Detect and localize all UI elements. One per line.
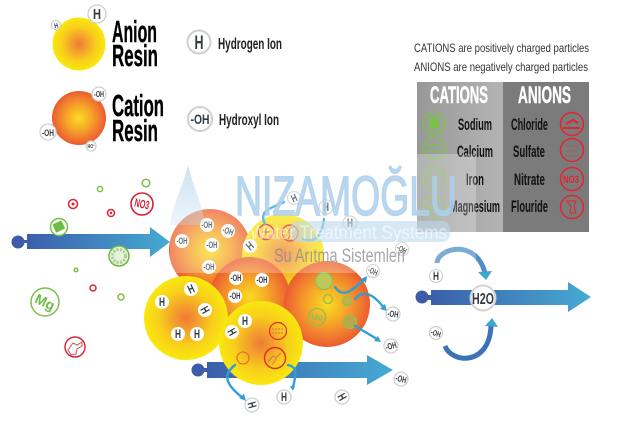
hydrogen joining water <box>430 249 492 283</box>
anion sphere: lower left <box>144 276 228 360</box>
anion resin legend: H <box>54 23 59 30</box>
cation resin legend: -OH <box>94 90 104 99</box>
ion names: Flouride <box>511 197 548 216</box>
ion names: Iron <box>466 170 484 189</box>
ion names <box>450 115 548 216</box>
water formation arrow <box>416 282 591 312</box>
captured cations in green <box>308 272 356 328</box>
cation sphere: centre <box>210 257 290 337</box>
hydrogen joining water: H <box>433 269 439 283</box>
floating contaminant particles: Mg <box>32 290 58 314</box>
hydroxyl ions on cation spheres: -OH <box>204 262 214 272</box>
hydrogen ion legend <box>188 30 282 54</box>
floating contaminant particles <box>31 179 153 357</box>
released hydrogen ions: H <box>244 400 260 410</box>
hydroxyl ions on cation spheres: -OH <box>230 273 242 283</box>
anion resin legend <box>52 5 158 73</box>
hydroxyl ions on cation spheres: -OH <box>221 224 235 238</box>
anion sphere: upper right <box>242 214 324 296</box>
hydroxyl ions on cation spheres <box>175 218 269 303</box>
hydrogen ions on anion spheres: H <box>185 281 197 297</box>
particles on inlet arrow <box>50 218 129 266</box>
released hydrogen ions: H <box>347 216 353 230</box>
ion names: Sulfate <box>513 142 545 161</box>
cation resin legend: -OH <box>87 142 94 148</box>
hydroxyl joining water <box>430 318 498 358</box>
ion names: Calcium <box>457 142 493 161</box>
hydrogen ion legend: Hydrogen Ion <box>218 36 282 53</box>
ion names: Chloride <box>511 115 548 134</box>
hydrogen ions on anion spheres: H <box>175 327 181 341</box>
hydroxyl ions on cation spheres: -OH <box>206 240 218 250</box>
hydroxyl ions on cation spheres: -OH <box>230 291 240 301</box>
hydrogen ions on anion spheres: H <box>197 304 213 316</box>
cation resin legend: -OH <box>42 128 54 138</box>
hydrogen ions on anion spheres: H <box>224 326 240 338</box>
outlet arrow bottom <box>192 355 393 385</box>
released hydroxyl ions: -OH <box>387 308 399 320</box>
released hydroxyl ions: -OH <box>366 265 379 278</box>
anion icons: NO3 <box>563 174 579 186</box>
released hydrogen ions: H <box>323 200 329 214</box>
hydrogen ions on anion spheres: H <box>243 239 257 253</box>
ion names: Sodium <box>458 115 492 134</box>
watermark logo: NIZAMOĞLU <box>235 164 457 227</box>
anion icons <box>560 112 584 218</box>
ion names: Magnesium <box>450 197 500 216</box>
cation sphere: upper left <box>169 209 251 291</box>
cation resin legend: Resin <box>112 113 158 148</box>
hydroxyl ions on cation spheres: -OH <box>176 236 188 246</box>
definitions text <box>414 41 589 74</box>
hydroxyl ion legend: Hydroxyl Ion <box>219 112 279 129</box>
hydrogen ions on anion spheres: H <box>194 327 200 341</box>
definitions text: CATIONS are positively charged particles <box>414 41 589 55</box>
panel: cations and anions table: ANIONS <box>518 82 571 109</box>
captured cations in green: Mg <box>311 313 323 322</box>
hydrogen ions on anion spheres: H <box>242 314 248 328</box>
hydrogen ions on anion spheres: H <box>159 295 165 309</box>
watermark logo: Water Treatment Systems <box>250 223 447 244</box>
cation sphere: right <box>284 261 370 347</box>
hydroxyl ions on cation spheres: -OH <box>256 275 268 285</box>
curved release arrows <box>227 202 387 401</box>
released hydroxyl ions: -OH <box>384 340 398 352</box>
hydroxyl ions on cation spheres: -OH <box>202 220 212 230</box>
released hydrogen ions <box>244 192 357 412</box>
cation resin legend: Cation <box>112 88 164 123</box>
ion names: Nitrate <box>514 170 545 189</box>
cation icons: Mg <box>428 203 440 213</box>
anion sphere: lower centre <box>219 301 303 385</box>
hydroxyl ion legend <box>188 107 279 131</box>
anion resin legend: H <box>93 6 101 23</box>
panel: cations and anions table <box>417 82 589 232</box>
hydrogen ion legend: H <box>194 33 204 54</box>
hydroxyl joining water: -OH <box>430 328 442 339</box>
released hydroxyl ions <box>366 242 408 386</box>
panel: cations and anions table: CATIONS <box>430 82 488 109</box>
watermark logo <box>170 154 476 273</box>
released hydrogen ions: H <box>281 390 287 404</box>
hydrogen ions on anion spheres <box>155 239 257 341</box>
released hydrogen ions: H <box>289 192 299 206</box>
water formation arrow: H2O <box>472 291 494 308</box>
floating contaminant particles: NO3 <box>133 196 151 212</box>
cation icons <box>423 112 445 218</box>
captured anions in red <box>237 224 298 368</box>
anion resin legend: Resin <box>112 38 158 73</box>
cation resin legend <box>40 87 164 151</box>
definitions text: ANIONS are negatively charged particles <box>414 60 588 74</box>
hydroxyl ion legend: -OH <box>190 111 210 127</box>
anion resin legend: Anion <box>112 14 157 49</box>
released hydroxyl ions: -OH <box>395 243 408 256</box>
released hydrogen ions: H <box>334 391 350 403</box>
inlet arrow <box>12 227 170 257</box>
watermark logo: Su Arıtma Sistemleri <box>274 246 405 267</box>
resin spheres cluster <box>144 209 370 385</box>
released hydroxyl ions: -OH <box>394 373 408 385</box>
